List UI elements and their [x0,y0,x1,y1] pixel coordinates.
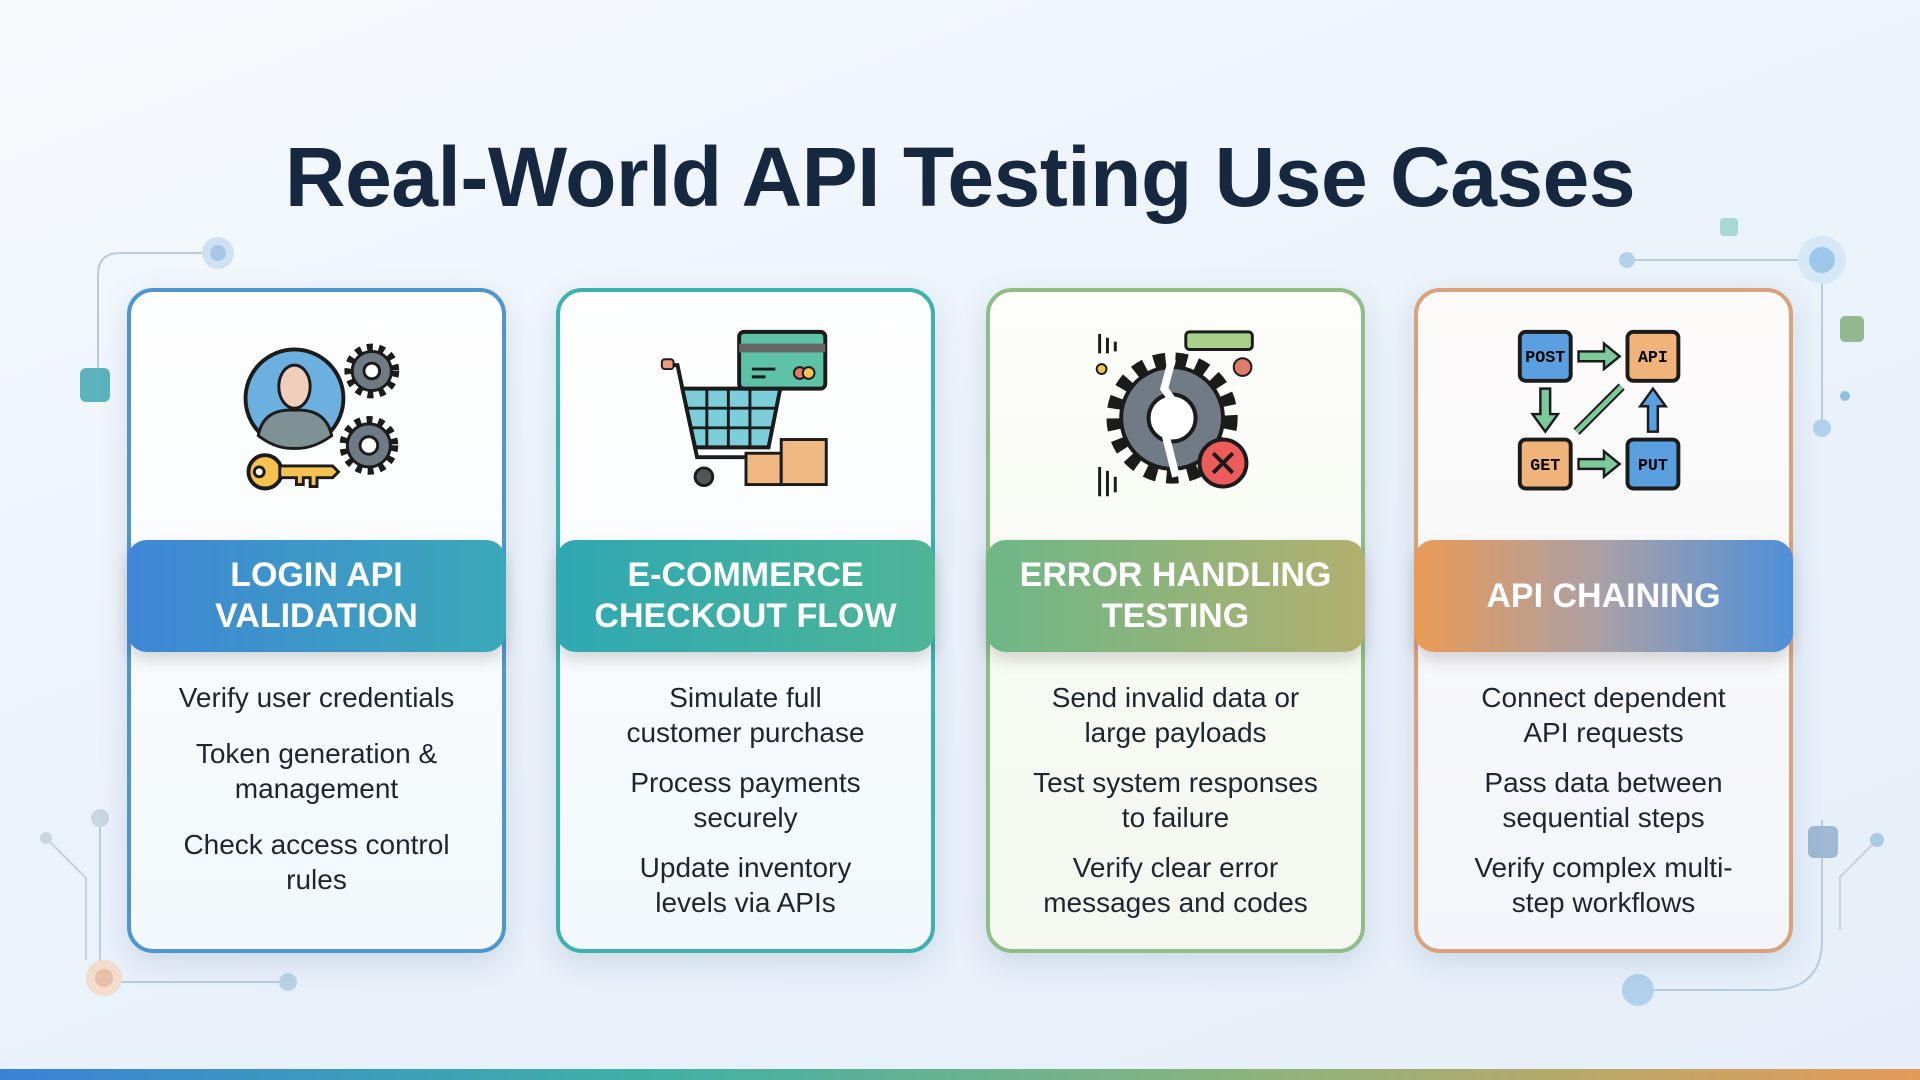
text: ecommerce points: Process payments [630,767,861,798]
header: login api validation: LOGIN API [230,556,403,594]
text: api chaining points [1474,682,1733,918]
text: error handling points: messages and codes [1043,887,1308,918]
icon: api chaining flow: GET [1530,456,1560,475]
text: ecommerce points: customer purchase [626,717,865,748]
text: error handling points: Test system responses [1033,767,1318,798]
text: ecommerce points: securely [693,802,798,833]
header: e-commerce checkout flow [556,540,935,652]
text: ecommerce points [626,682,865,918]
header: e-commerce checkout flow: CHECKOUT FLOW [594,597,897,635]
header: api chaining [1414,540,1793,652]
text: ecommerce points: Simulate full [669,682,822,713]
text: api chaining points: Connect dependent [1481,682,1726,713]
text: login points: rules [286,864,347,895]
header: error handling testing: TESTING [1102,597,1249,635]
panel: e-commerce checkout [556,288,935,953]
text: error handling points: Verify clear error [1073,852,1278,883]
text: api chaining points: API requests [1523,717,1684,748]
text: api chaining points: Pass data between [1484,767,1723,798]
text: api chaining points: step workflows [1512,887,1695,918]
text: error handling points: Send invalid data or [1052,682,1299,713]
icon: broken gear with error [1096,330,1254,496]
icon: api chaining flow: POST [1525,348,1565,367]
text: api chaining points: sequential steps [1502,802,1705,833]
text: ecommerce points: levels via APIs [655,887,836,918]
text: login points: management [235,773,398,804]
icon: api chaining flow [1518,330,1680,490]
text: ecommerce points: Update inventory [640,852,851,883]
header: error handling testing: ERROR HANDLING [1020,556,1331,594]
panel: login api validation [127,288,506,953]
text: error handling points: large payloads [1084,717,1267,748]
header: e-commerce checkout flow: E-COMMERCE [627,556,864,594]
text: error handling points [1033,682,1318,918]
text: api chaining points: Verify complex multi- [1474,852,1733,883]
text: login points: Token generation & [196,738,437,769]
text: login points: Verify user credentials [179,682,454,713]
text: login points: Check access control [183,829,450,860]
header: api chaining: API CHAINING [1486,576,1721,614]
panel: error handling testing [986,288,1365,953]
icon: api chaining flow: PUT [1638,456,1668,475]
panel: api chaining [1414,288,1793,953]
title: Real-World API Testing Use Cases [285,130,1635,224]
icon: user with key and gears [244,344,400,490]
icon: cart with card and boxes [660,330,828,487]
header: login api validation [127,540,506,652]
text: error handling points: to failure [1122,802,1229,833]
text: login points [178,682,454,895]
header: login api validation: VALIDATION [215,597,418,635]
header: error handling testing [986,540,1365,652]
icon: api chaining flow: API [1638,348,1668,367]
